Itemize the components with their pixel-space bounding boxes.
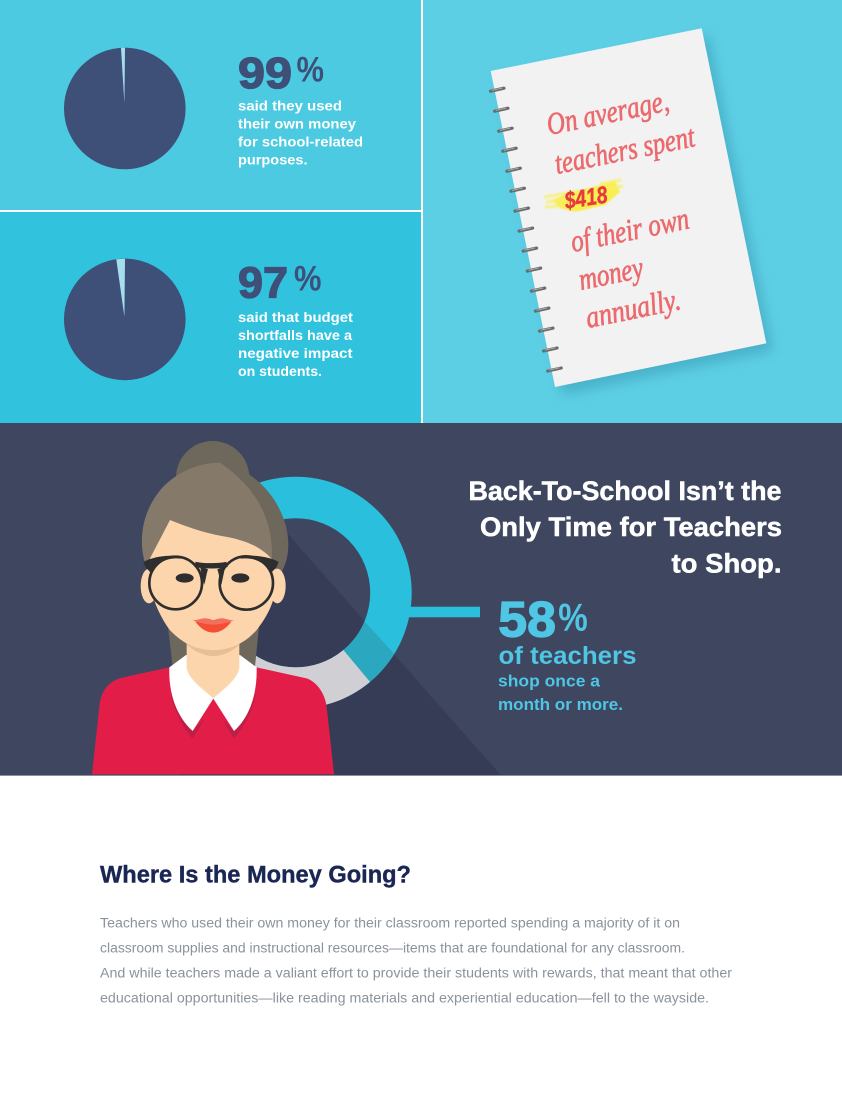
heading: back-to-school: Back-To-School Isn’t the <box>468 476 782 506</box>
text: 99 percent description <box>238 98 363 168</box>
handwritten note: annually. <box>582 281 683 335</box>
connector line <box>409 607 480 617</box>
text: 99 percent description: said they used <box>238 98 342 114</box>
heading: back-to-school: to Shop. <box>672 548 782 578</box>
notebook page <box>491 28 766 387</box>
hair back <box>213 463 288 583</box>
hair bun <box>176 441 249 514</box>
body text: educational opportunities—like reading materials and experiential education—fell to the wayside. <box>100 990 709 1005</box>
body text: Teachers who used their own money for their classroom reported spending a majority of it on <box>100 915 680 930</box>
heading: where is the money going: Where Is the Money Going? <box>100 862 411 889</box>
statistic: 58 percent: shop once a <box>498 672 601 691</box>
statistic: 97 percent: 97 <box>238 258 288 307</box>
long shadow <box>180 533 501 775</box>
statistic: 99 percent: 99 <box>238 49 292 98</box>
eyes <box>176 573 249 583</box>
notebook shadow <box>498 36 773 395</box>
statistic: 99 percent <box>238 49 324 98</box>
panel: 99 percent statistic <box>0 0 421 210</box>
pie chart: 97 percent <box>64 259 186 380</box>
donut chart: 58 percent <box>200 498 394 688</box>
hair front <box>142 463 272 570</box>
heading: back-to-school <box>468 476 782 578</box>
body text <box>100 915 733 1005</box>
illustration: teacher <box>92 441 334 774</box>
text: 97 percent description: negative impact <box>238 345 353 361</box>
handwritten note: On average, <box>543 83 672 142</box>
text: 97 percent description: on students. <box>238 363 322 379</box>
handwritten note: $418 <box>562 181 610 215</box>
statistic: 58 percent: 58 <box>498 592 556 648</box>
sweater <box>92 667 334 774</box>
text: 97 percent description: shortfalls have a <box>238 327 352 343</box>
statistic: 58 percent: % <box>558 597 588 640</box>
spiral binding <box>490 88 561 371</box>
face <box>149 520 277 650</box>
panel: 97 percent statistic <box>0 212 421 423</box>
statistic: 99 percent: % <box>296 50 324 90</box>
body text: classroom supplies and instructional resources—items that are foundational for any classroom. <box>100 940 685 955</box>
statistic: 58 percent: month or more. <box>498 695 623 714</box>
statistic: 97 percent <box>238 258 322 307</box>
handwritten note: teachers spent <box>551 118 699 181</box>
panel: notebook <box>423 0 842 423</box>
collar shadow <box>171 693 256 739</box>
neck <box>187 637 239 698</box>
panel: back-to-school shopping <box>0 423 842 776</box>
pie chart: 99 percent <box>64 48 186 169</box>
neck shadow <box>187 640 239 656</box>
collar <box>169 655 257 731</box>
statistic: 58 percent: of teachers <box>498 642 636 670</box>
text: 99 percent description: for school-related <box>238 134 363 150</box>
handwritten note <box>543 83 699 335</box>
glasses <box>143 556 279 610</box>
text: 97 percent description: said that budget <box>238 309 353 325</box>
body text: And while teachers made a valiant effort to provide their students with rewards, that meant that other <box>100 965 733 980</box>
ears <box>141 569 286 603</box>
long hair behind neck <box>166 610 261 667</box>
highlighter streak <box>544 180 623 212</box>
text: 99 percent description: purposes. <box>238 152 308 168</box>
statistic: 97 percent: % <box>294 259 322 298</box>
statistic: 58 percent <box>498 592 636 714</box>
text: 97 percent description <box>238 309 353 379</box>
text: 99 percent description: their own money <box>238 116 356 132</box>
handwritten note: money <box>575 250 646 297</box>
heading: back-to-school: Only Time for Teachers <box>480 512 782 542</box>
handwritten note: of their own <box>567 201 692 259</box>
lips <box>192 618 234 633</box>
